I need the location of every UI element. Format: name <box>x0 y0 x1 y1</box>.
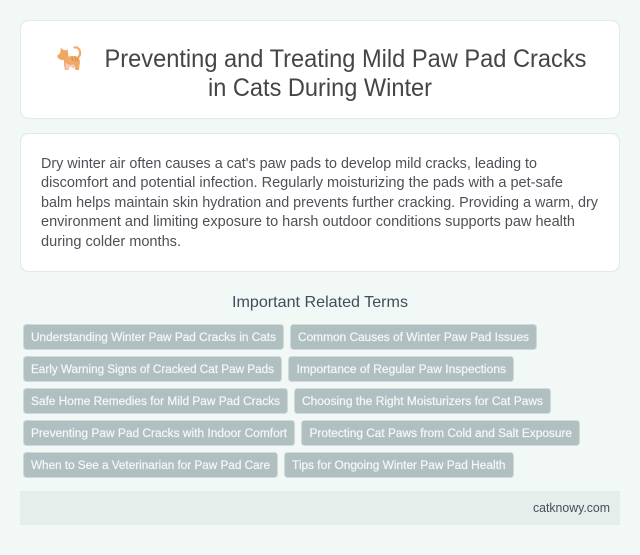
tag: Protecting Cat Paws from Cold and Salt Exposure <box>310 426 572 440</box>
title: Preventing and Treating Mild Paw Pad Cracks <box>104 45 586 73</box>
title <box>104 45 586 102</box>
icon: cat <box>57 47 80 70</box>
tag <box>24 356 282 382</box>
tag <box>290 324 536 350</box>
tag <box>284 452 514 478</box>
text block: summary paragraph: Dry winter air often causes a cat's paw pads to develop mild cracks, leading to <box>41 156 537 172</box>
tag <box>294 388 550 414</box>
heading: related terms: Important Related Terms <box>232 294 408 311</box>
panel: summary text <box>20 134 620 272</box>
tag: Safe Home Remedies for Mild Paw Pad Cracks <box>31 394 280 408</box>
text block: summary paragraph: balm helps maintain skin hydration and prevents further cracking. Providing a warm, dry <box>41 195 599 211</box>
panel: title card <box>20 20 620 118</box>
tag <box>24 388 288 414</box>
panel: related term tags <box>24 324 580 478</box>
tag <box>24 452 278 478</box>
tag <box>24 420 294 446</box>
footer <box>20 491 620 525</box>
text block: summary paragraph <box>41 156 599 250</box>
tag: When to See a Veterinarian for Paw Pad Care <box>31 458 270 472</box>
title: in Cats During Winter <box>208 74 432 102</box>
tag: Preventing Paw Pad Cracks with Indoor Comfort <box>31 426 288 440</box>
tag: Understanding Winter Paw Pad Cracks in Cats <box>31 330 276 344</box>
tag <box>288 356 514 382</box>
tag: Tips for Ongoing Winter Paw Pad Health <box>292 458 506 472</box>
tag <box>24 324 284 350</box>
tag <box>302 420 580 446</box>
tag: Importance of Regular Paw Inspections <box>296 362 506 376</box>
tag: Choosing the Right Moisturizers for Cat Paws <box>302 394 543 408</box>
text block: summary paragraph: during colder months. <box>41 234 181 250</box>
tag: Early Warning Signs of Cracked Cat Paw Pads <box>31 362 274 376</box>
text block: summary paragraph: environment and limiting exposure to harsh outdoor conditions supports paw health <box>41 214 575 230</box>
footer source text: catknowy.com <box>533 500 610 515</box>
text block: summary paragraph: discomfort and potential infection. Regularly moisturizing the pads with a pet-safe <box>41 175 563 191</box>
tag: Common Causes of Winter Paw Pad Issues <box>298 330 529 344</box>
